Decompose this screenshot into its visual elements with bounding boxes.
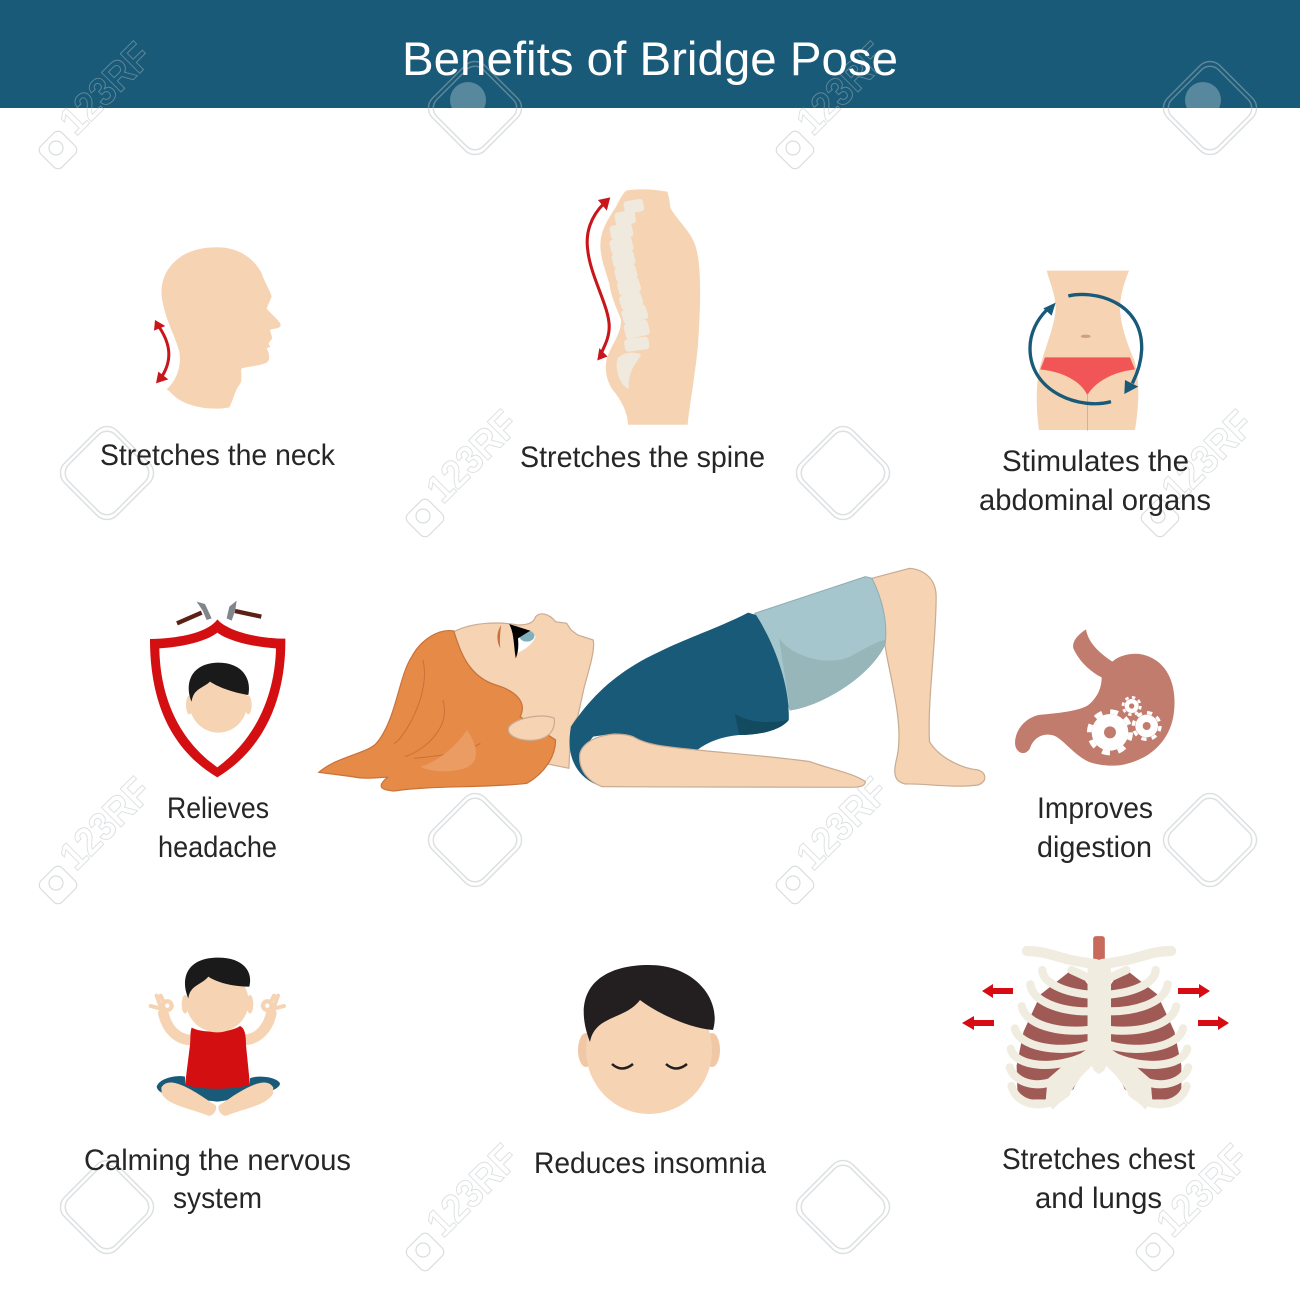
label: relieves headache — [158, 792, 277, 864]
label: stimulates the abdominal organs: abdominal organs — [979, 484, 1211, 517]
panel: headache — [150, 601, 285, 864]
ribs left and right — [1010, 970, 1188, 1104]
icon: ribcage — [1010, 936, 1188, 1110]
icon: legs — [157, 1076, 280, 1116]
label: stretches chest and lungs: Stretches chest — [1002, 1143, 1196, 1176]
icon: rotation arrows — [1030, 294, 1142, 404]
icon: stomach — [1015, 629, 1175, 766]
label: calming the nervous system — [84, 1144, 351, 1215]
illustration: bridge pose figure — [319, 568, 985, 791]
text: 123RF — [418, 1136, 527, 1245]
label: reduces insomnia: Reduces insomnia — [534, 1147, 766, 1180]
label: stimulates the abdominal organs: Stimulates the — [1002, 445, 1189, 478]
icon: red shirt — [185, 1026, 250, 1089]
panel: insomnia — [534, 965, 766, 1180]
panel: nervous system — [84, 958, 351, 1215]
shirt — [570, 613, 789, 787]
text: 123RF — [788, 769, 897, 878]
label: relieves headache: headache — [158, 831, 277, 864]
trachea — [1093, 936, 1105, 965]
icon: abdomen — [1030, 271, 1142, 431]
label: calming the nervous system: system — [173, 1182, 262, 1215]
lung left and right — [1017, 967, 1181, 1100]
text: 123RF — [1153, 402, 1262, 511]
text: 123RF — [418, 402, 527, 511]
panel: neck — [100, 247, 336, 472]
eye — [497, 624, 536, 658]
header band — [0, 0, 1300, 108]
icon: underwear — [1040, 357, 1135, 395]
ear — [508, 716, 554, 740]
label: relieves headache: Relieves — [167, 792, 269, 825]
label: stretches chest and lungs: and lungs — [1035, 1182, 1162, 1215]
text: 123RF — [51, 769, 160, 878]
title: Benefits of Bridge Pose — [402, 32, 898, 85]
panel: abdominal organs — [979, 271, 1211, 517]
label: improves digestion — [1037, 792, 1153, 864]
hair — [319, 631, 556, 791]
leg — [872, 568, 985, 786]
sternum and cartilage — [1046, 964, 1152, 1110]
arrows: chest expansion — [962, 984, 1229, 1030]
label: stretches the spine: Stretches the spine — [520, 441, 765, 474]
icon: gears — [1089, 697, 1160, 753]
label: stimulates the abdominal organs — [979, 445, 1211, 517]
label: stretches chest and lungs — [1002, 1143, 1196, 1215]
icon: arms and hands — [151, 996, 284, 1040]
clavicles — [1027, 951, 1171, 964]
icon: head profile — [154, 247, 281, 409]
label: calming the nervous system: Calming the nervous — [84, 1144, 351, 1177]
label: improves digestion: digestion — [1037, 831, 1152, 864]
arrow: spine stretch — [587, 197, 610, 360]
icon: shield — [150, 619, 285, 777]
panel: digestion — [1015, 629, 1175, 864]
icon: head — [186, 663, 252, 733]
arm — [580, 734, 865, 787]
icon: hammers — [177, 601, 261, 623]
text: 123RF — [51, 34, 160, 143]
icon: sleeping face — [578, 965, 720, 1114]
panel: spine — [520, 189, 765, 474]
shorts — [755, 577, 886, 710]
label: stretches the neck: Stretches the neck — [100, 439, 336, 472]
icon: head — [182, 958, 253, 1032]
label: improves digestion: Improves — [1037, 792, 1153, 825]
icon: torso and spine — [587, 189, 700, 425]
text: 123RF — [1148, 1136, 1257, 1245]
arrow: neck stretch — [154, 320, 169, 383]
head and neck — [454, 614, 594, 768]
text: 123RF — [788, 34, 897, 143]
panel: chest and lungs — [962, 936, 1229, 1215]
